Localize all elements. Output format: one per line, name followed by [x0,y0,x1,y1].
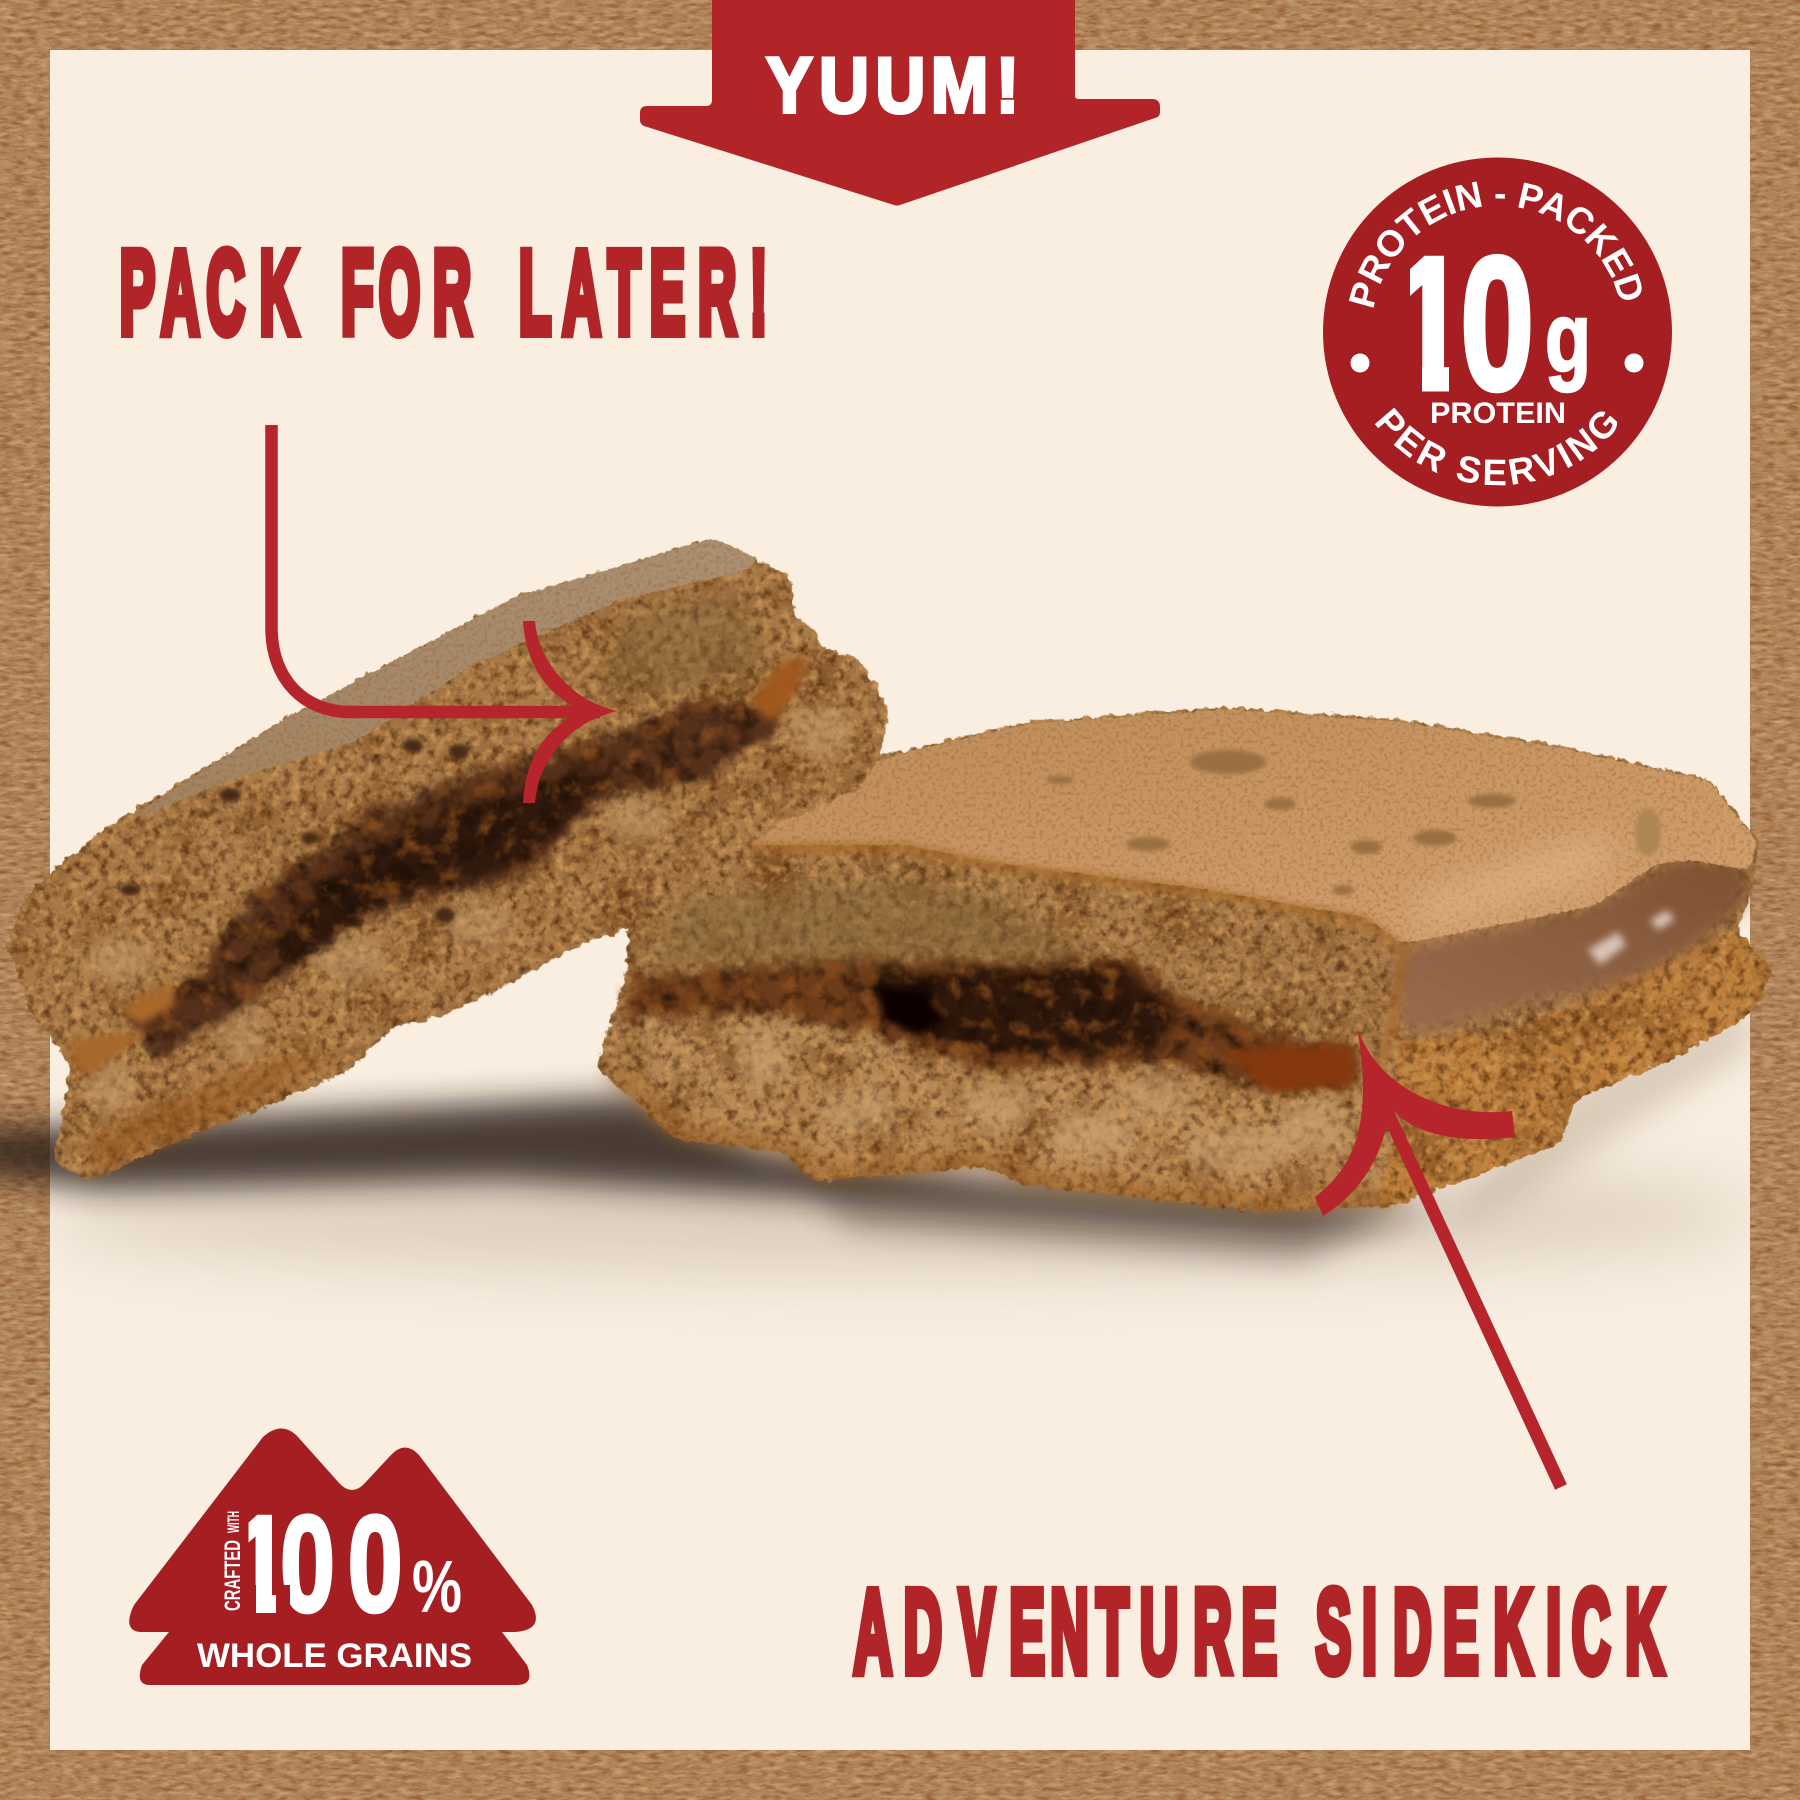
arc text bottom: PER SERVING [1374,408,1618,486]
caramel highlights [1588,910,1674,965]
badge dots [1350,354,1644,372]
orange baked lower right edge [1372,929,1775,1212]
percent sign: % [412,1545,462,1628]
right cookie [596,707,1775,1212]
protein badge [1323,158,1672,506]
badge unit: g [1545,282,1591,392]
top surface dimples [1046,750,1661,895]
cookie body [7,538,888,1181]
arrow: pack for later [272,425,617,803]
banner text: YUUM! [766,41,1019,129]
air pockets [120,739,469,923]
oat flecks [736,1030,1344,1172]
caramel filling on end [1225,1045,1354,1092]
cookie shadow on the surface [0,1000,1760,1273]
upper crumb shading [650,880,1100,970]
badge number: 10 [1393,218,1534,430]
filling shadow hole [875,985,945,1035]
cookie body [596,707,1775,1212]
front edge rim [753,848,1403,1100]
badge label: PROTEIN [1430,397,1566,430]
caramel side band [1396,860,1748,1035]
filling halo [623,958,1357,1090]
oat flecks [84,704,850,1118]
top banner arrow [640,0,1160,206]
darkest filling core [870,965,1180,1050]
with label: WITH [224,1511,243,1533]
badge number: 100 [234,1488,403,1641]
baked bottom rim [610,1070,1396,1204]
dark filling core [265,765,610,960]
badge label: WHOLE GRAINS [197,1637,472,1675]
orange edge [70,980,175,1075]
top surface highlight [1410,830,1620,930]
lower crumb layer [600,1006,1442,1208]
heading: pack for later: PACK FOR LATER! [120,227,767,359]
whole grains badge [129,1428,536,1685]
upper crumb shading [600,590,770,690]
badge number shaping masks [1385,262,1466,396]
arrow: adventure sidekick [1315,1027,1561,1487]
top surface [720,709,1757,944]
badge number shaping masks [225,1505,290,1616]
arc text top: PROTEIN - PACKED [1348,182,1642,308]
crafted label: CRAFTED [220,1540,245,1611]
caramel smear [750,655,806,722]
heading: adventure sidekick: ADVENTURE SIDEKICK [854,1566,1664,1698]
left cookie piece [7,538,888,1181]
base shade [80,1050,340,1170]
crust top [105,538,762,832]
filling halo [120,700,781,1055]
